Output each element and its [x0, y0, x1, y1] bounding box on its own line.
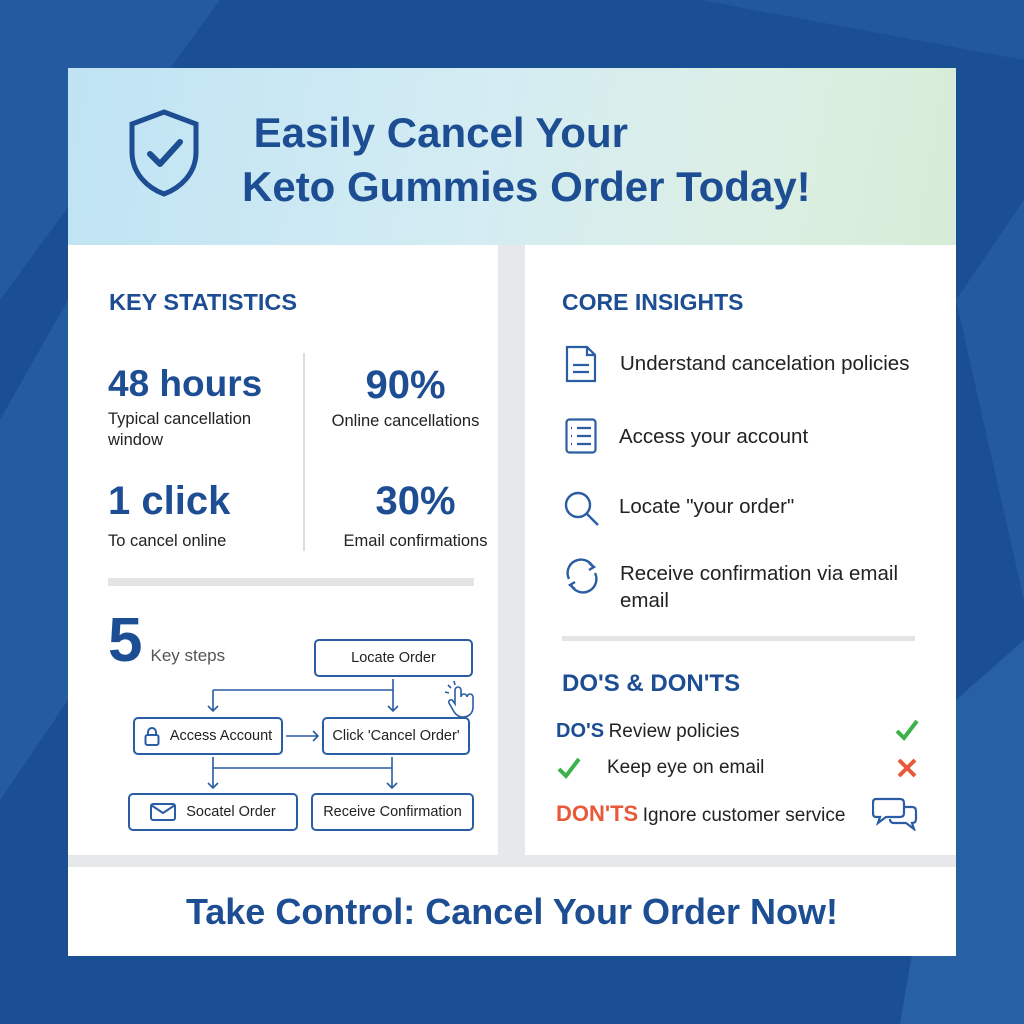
item: confirmation — [566, 558, 898, 612]
heading: CORE INSIGHTS — [562, 289, 743, 315]
title — [242, 109, 811, 210]
stat: 1 click: To cancel online — [108, 532, 226, 550]
box: locate order: Locate Order — [351, 650, 436, 666]
title: Keto Gummies Order Today! — [242, 163, 811, 210]
dont: ignore customer service: DON'TS Ignore customer service — [556, 801, 845, 826]
stat: 90% — [332, 363, 479, 430]
stat: 48 hours: window — [108, 431, 163, 449]
dont: ignore customer service — [556, 798, 918, 831]
box: receive confirmation: Receive Confirmation — [323, 804, 462, 820]
5 key steps: 5 Key steps — [108, 606, 225, 675]
stat: 48 hours — [108, 363, 262, 449]
item: account — [565, 418, 808, 454]
flowchart — [128, 639, 474, 831]
stat: 90%: Online cancellations — [332, 412, 479, 430]
item: locate: Locate "your order" — [619, 495, 794, 518]
do: review policies: DO'S Review policies — [556, 720, 740, 742]
do: review policies — [556, 720, 918, 742]
item: confirmation: email — [620, 589, 669, 612]
box: click cancel order: Click 'Cancel Order' — [332, 728, 460, 744]
stat: 30%: Email confirmations — [344, 532, 487, 550]
stat: 90%: 90% — [365, 363, 446, 407]
stat: 48 hours: Typical cancellation — [108, 410, 251, 428]
item: confirmation: Receive confirmation via email — [620, 562, 898, 585]
insight list — [564, 346, 909, 612]
heading: dos and donts: DO'S & DON'TS — [562, 670, 740, 697]
item: locate — [564, 492, 794, 526]
box: access account — [133, 717, 283, 755]
icon: shield — [130, 109, 198, 197]
box: socatel order: Socatel Order — [186, 804, 276, 820]
box: access account: Access Account — [170, 728, 272, 744]
footer banner: Take Control: Cancel Your Order Now! — [186, 890, 838, 932]
box: socatel order — [128, 793, 298, 831]
heading: KEY STATISTICS — [109, 289, 297, 315]
stat: 1 click: 1 click — [108, 479, 230, 523]
stat: 48 hours: 48 hours — [108, 363, 262, 404]
title: Easily Cancel Your — [254, 109, 628, 156]
stat: 30%: 30% — [375, 479, 456, 523]
box: receive confirmation — [311, 793, 474, 831]
item: policies: Understand cancelation policies — [620, 352, 909, 375]
stat: 30% — [344, 479, 487, 550]
do: keep eye on email — [558, 757, 916, 779]
card background — [68, 68, 956, 956]
item: policies — [566, 346, 909, 382]
stat: 1 click — [108, 479, 230, 550]
arrows — [208, 679, 474, 789]
box: click cancel order — [322, 717, 470, 755]
do: keep eye on email: Keep eye on email — [607, 757, 764, 778]
panel: key statistics — [68, 245, 498, 855]
footer banner — [68, 867, 956, 956]
item: account: Access your account — [619, 425, 808, 448]
box: locate order — [314, 639, 473, 677]
panel: core insights — [525, 245, 956, 855]
header — [68, 68, 956, 245]
